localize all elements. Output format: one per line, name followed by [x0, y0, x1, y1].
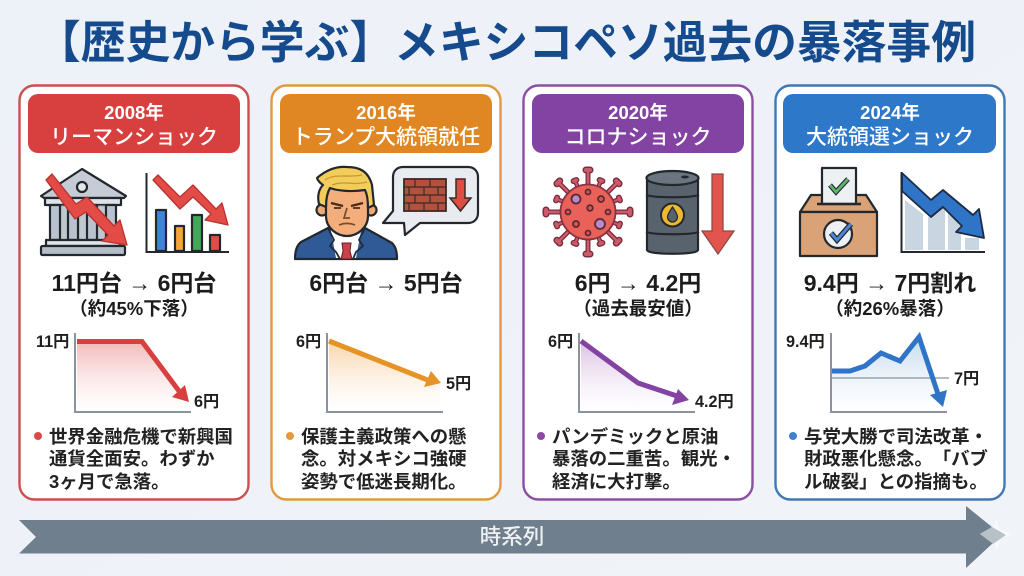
timeline label: 時系列	[480, 525, 544, 549]
header: 2024: 大統領選ショック	[806, 126, 974, 149]
bullet text: 2008: 3ヶ月で急落。	[49, 471, 170, 492]
icon: down arrow	[702, 174, 734, 254]
icon: bank with falling arrow	[41, 169, 127, 255]
header: 2008: 2008年	[104, 102, 164, 123]
icon: ballot box	[800, 168, 877, 256]
icon: bar chart with falling arrow	[146, 173, 229, 252]
mini chart: 9.4 to 7 yen	[786, 333, 979, 412]
panel: 2020 Covid	[524, 86, 752, 500]
header: 2024	[783, 94, 996, 153]
mini chart: 6 to 4.2 yen: 6円	[548, 333, 573, 351]
mini chart: 9.4 to 7 yen: 9.4円	[786, 333, 825, 351]
bullet text: 2020	[537, 426, 736, 492]
bullet text: 2024	[789, 426, 988, 492]
note: 2008: （約45%下落）	[69, 298, 199, 319]
header: 2016: 2016年	[356, 102, 416, 123]
icon: oil barrel	[646, 171, 699, 254]
bullet text: 2008: 通貨全面安。わずか	[49, 448, 215, 469]
mini chart: 6 to 5 yen	[296, 333, 471, 412]
value: 2020: 6円 → 4.2円	[575, 270, 701, 296]
bullet text: 2016: 保護主義政策への懸	[301, 426, 467, 447]
note: 2020: （過去最安値）	[573, 298, 703, 319]
bullet text: 2016: 念。対メキシコ強硬	[301, 448, 467, 469]
bullet text: 2016	[286, 426, 467, 492]
note: 2024: （約26%暴落）	[825, 298, 955, 319]
bullet text: 2024: ル破裂」との指摘も。	[804, 471, 988, 492]
mini chart: 9.4 to 7 yen: 7円	[954, 370, 979, 388]
icon: speech bubble with wall and down arrow	[383, 167, 478, 235]
bullet text: 2020: パンデミックと原油	[552, 426, 718, 447]
mini chart: 6 to 4.2 yen	[548, 333, 734, 412]
mini chart: 6 to 5 yen: 5円	[446, 375, 471, 393]
bullet text: 2008: 世界金融危機で新興国	[49, 426, 233, 447]
bullet text: 2020: 暴落の二重苦。観光・	[552, 448, 736, 469]
mini chart: 6 to 4.2 yen: 4.2円	[695, 393, 734, 411]
icon: virus	[546, 170, 630, 254]
bullet text: 2024: 与党大勝で司法改革・	[804, 426, 988, 447]
header: 2008	[28, 94, 240, 153]
panel: 2024 election	[776, 86, 1004, 500]
bullet text: 2008	[34, 426, 233, 492]
value: 2016: 6円台 → 5円台	[309, 270, 463, 296]
value: 2024: 9.4円 → 7円割れ	[804, 270, 976, 296]
title: 【歴史から学ぶ】メキシコペソ過去の暴落事例	[36, 18, 976, 68]
header: 2016	[280, 94, 492, 153]
icon: man in suit	[295, 167, 397, 259]
bullet text: 2024: 財政悪化懸念。「バブ	[804, 448, 988, 469]
panel: 2016 Trump	[272, 86, 500, 500]
icon: falling area chart	[902, 172, 985, 252]
header: 2016: トランプ大統領就任	[292, 126, 480, 149]
header: 2020: コロナショック	[564, 126, 712, 149]
bullet text: 2016: 姿勢で低迷長期化。	[301, 471, 467, 492]
bullet text: 2020: 経済に大打撃。	[552, 471, 681, 492]
value: 2008: 11円台 → 6円台	[52, 270, 216, 296]
header: 2008: リーマンショック	[50, 126, 218, 149]
mini chart: 11 to 6 yen: 6円	[194, 393, 219, 411]
header: 2024: 2024年	[860, 102, 920, 123]
mini chart: 6 to 5 yen: 6円	[296, 333, 321, 351]
header: 2020	[532, 94, 744, 153]
mini chart: 11 to 6 yen: 11円	[36, 333, 69, 351]
header: 2020: 2020年	[608, 102, 668, 123]
mini chart: 11 to 6 yen	[36, 333, 219, 412]
timeline arrow	[19, 506, 1012, 568]
panel: 2008 Lehman shock	[20, 86, 248, 500]
